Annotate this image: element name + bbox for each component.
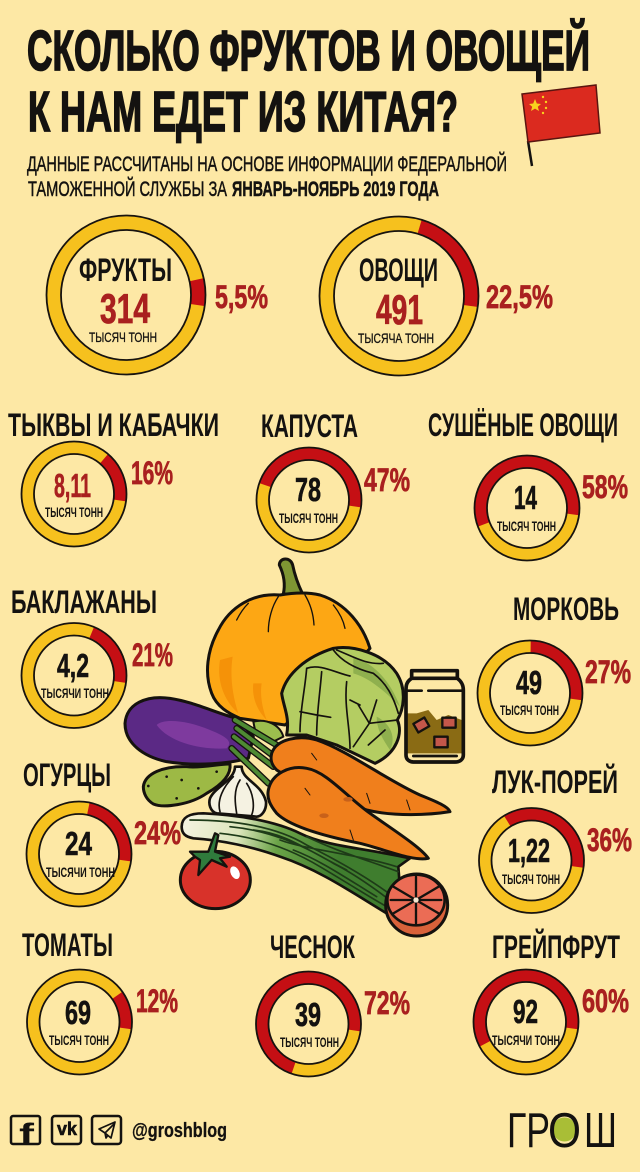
donut: garlic <box>249 965 368 1083</box>
donut: vegetables: ОВОЩИ <box>359 252 438 288</box>
icon: carrot bottom <box>268 768 428 859</box>
heading: garlic: ЧЕСНОК <box>270 929 355 965</box>
heading: tomatoes: ТОМАТЫ <box>22 927 113 963</box>
percent: fruits: 5,5% <box>215 279 268 315</box>
donut: cucumbers: ТЫСЯЧИ ТОНН <box>46 865 115 880</box>
donut: tomatoes: ТЫСЯЧ ТОНН <box>49 1033 109 1048</box>
logo: grosh: ГР <box>507 1104 550 1158</box>
donut: fruits: 314 <box>100 285 150 332</box>
donut: pumpkins <box>8 428 140 560</box>
heading: cabbage: КАПУСТА <box>261 408 358 444</box>
donut: fruits: ТЫСЯЧ ТОНН <box>89 330 157 345</box>
donut: leek: 1,22 <box>508 832 550 869</box>
logo: grosh: О <box>548 1104 581 1158</box>
donut: vegetables: 491 <box>376 286 423 333</box>
donut: dried vegetables <box>467 448 587 568</box>
donut: fruits: ФРУКТЫ <box>79 252 172 288</box>
donut: cucumbers: 24 <box>65 825 92 862</box>
donut: carrots <box>478 640 582 746</box>
percent: garlic: 72% <box>364 985 410 1021</box>
subtitle <box>27 152 507 201</box>
percent: vegetables: 22,5% <box>486 279 553 315</box>
icon: facebook: f <box>19 1118 36 1151</box>
donut: dried vegetables: ТЫСЯЧ ТОНН <box>497 519 556 534</box>
donut: pumpkins: ТЫСЯЧ ТОНН <box>45 505 103 520</box>
donut: leek: ТЫСЯЧ ТОНН <box>502 872 560 887</box>
donut: grapefruit: ТЫСЯЧИ ТОНН <box>492 1033 560 1048</box>
logo: grosh: Ш <box>584 1104 617 1158</box>
icon: vk: vk <box>57 1119 78 1139</box>
donut: tomatoes <box>15 957 144 1087</box>
donut: cabbage: ТЫСЯЧ ТОНН <box>279 511 338 526</box>
icon: jar of dried vegetables <box>406 671 463 762</box>
donut: eggplants <box>13 615 135 736</box>
icon: telegram <box>92 1116 121 1144</box>
percent: tomatoes: 12% <box>136 983 178 1019</box>
donut: vegetables <box>309 206 489 386</box>
donut: dried vegetables: 14 <box>514 479 537 516</box>
donut: eggplants: ТЫСЯЧИ ТОНН <box>41 686 109 701</box>
illustration: vegetables <box>125 559 463 936</box>
donut: grapefruit <box>463 959 589 1085</box>
donut: vegetables: ТЫСЯЧА ТОНН <box>358 331 434 346</box>
icon: grapefruit <box>386 874 448 936</box>
donut: pumpkins: 8,11 <box>54 467 91 504</box>
icon: pumpkin <box>208 559 370 725</box>
donut: garlic: 39 <box>295 996 321 1033</box>
heading: pumpkins: ТЫКВЫ И КАБАЧКИ <box>8 407 219 443</box>
donut: grapefruit: 92 <box>513 993 538 1030</box>
donut: leek <box>468 797 595 924</box>
icon: eggplant <box>125 698 283 783</box>
icon: leek <box>182 813 410 913</box>
donut: fruits <box>41 210 211 380</box>
icon: carrot top <box>271 738 450 815</box>
donut: cabbage <box>250 441 368 559</box>
donut: cabbage: 78 <box>295 471 321 508</box>
percent: pumpkins: 16% <box>131 455 173 491</box>
logo: grosh <box>507 1104 617 1158</box>
title <box>27 18 590 144</box>
icon: vk <box>52 1116 81 1144</box>
donut: carrots: ТЫСЯЧ ТОНН <box>500 703 559 718</box>
percent: eggplants: 21% <box>132 637 173 673</box>
donut: cucumbers <box>24 799 134 909</box>
subtitle: ТАМОЖЕННОЙ СЛУЖБЫ ЗА <box>28 177 227 201</box>
percent: cabbage: 47% <box>364 462 410 498</box>
donut: tomatoes: 69 <box>65 994 91 1031</box>
donut: eggplants: 4,2 <box>57 647 89 684</box>
icon: china flag <box>522 85 600 166</box>
heading: cucumbers: ОГУРЦЫ <box>23 757 111 793</box>
donut: garlic: ТЫСЯЧ ТОНН <box>280 1035 339 1050</box>
icon: facebook <box>11 1116 40 1151</box>
handle: @groshblog <box>132 1120 227 1142</box>
donut: carrots: 49 <box>516 664 542 701</box>
percent: cucumbers: 24% <box>134 815 181 851</box>
subtitle: ЯНВАРЬ-НОЯБРЬ 2019 ГОДА <box>232 178 439 201</box>
icon: cabbage <box>282 648 403 763</box>
heading: eggplants: БАКЛАЖАНЫ <box>11 584 157 620</box>
icon: cucumber <box>143 764 230 806</box>
icon: garlic <box>209 767 266 817</box>
icon: tomato <box>180 833 250 909</box>
